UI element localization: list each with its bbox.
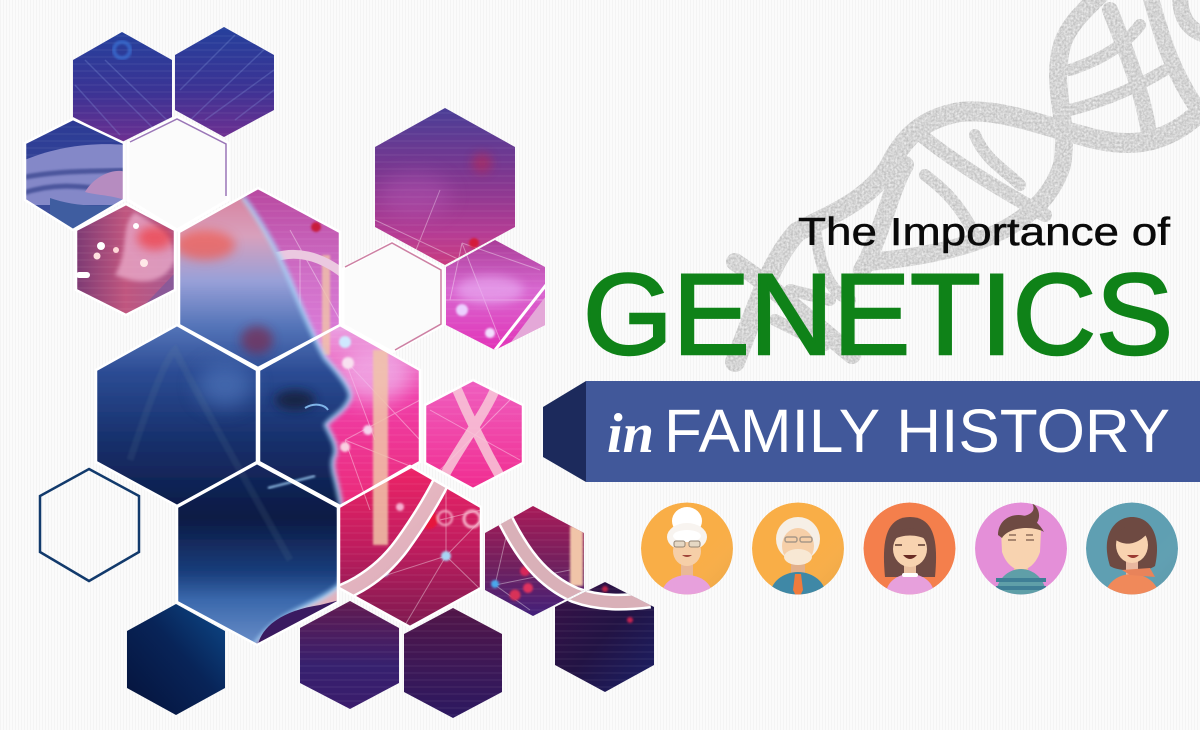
- avatar: woman with scarf: [1086, 502, 1178, 594]
- DNA strand: corner in magenta hexagon: [494, 284, 545, 350]
- hexagon: face and pink network: [259, 325, 420, 506]
- head: brain glow in lower left hexagon: [77, 211, 174, 304]
- head: temple shadow and eye: [241, 326, 273, 354]
- horizontal scan lines: [115, 28, 654, 716]
- avatar: grandmother: [641, 502, 733, 594]
- avatar: boy with striped shirt: [975, 502, 1067, 594]
- hexagon: magenta: [446, 240, 545, 350]
- hexagon: upper head: [179, 188, 340, 368]
- node group: red and pale molecules: [311, 222, 633, 623]
- banner text: FAMILY HISTORY: FAMILY HISTORY: [664, 397, 1170, 465]
- hexagon: navy back of head: [96, 325, 257, 506]
- banner word: in: in: [607, 403, 654, 465]
- avatar: girl with dark hair: [864, 502, 956, 594]
- head: blue sheen on back of head: [197, 363, 253, 407]
- head: brain glow in skull: [175, 230, 235, 260]
- hexagon: blue top left: [73, 32, 172, 142]
- outline hexagon: upper white: [128, 117, 228, 230]
- head: lower shadow: [258, 600, 337, 643]
- hexagon: dark violet: [555, 582, 654, 692]
- hexagon: large purple: [375, 108, 515, 265]
- illustration: network, DNA and head inside hexagons: [26, 28, 654, 716]
- hexagon: crimson: [339, 466, 481, 627]
- hexagon: navy bottom: [127, 604, 225, 715]
- molecular network lines: [290, 190, 570, 625]
- circuit details in blue hexagons: [75, 35, 274, 135]
- glow: red spot on large purple hexagon: [472, 153, 492, 173]
- avatar: grandfather: [752, 502, 844, 594]
- head: brain folds in left hexagon: [26, 144, 123, 228]
- DNA strand: crossing bands in small pink hexagon: [442, 385, 502, 480]
- banner bar: [586, 381, 1200, 482]
- title: GENETICS: GENETICS: [583, 251, 1173, 379]
- outline hexagon: navy: [40, 469, 139, 581]
- hexagon: brain left: [25, 119, 124, 230]
- hexagon: red and violet: [485, 506, 584, 616]
- DNA strand: tan vertical bars: [322, 255, 583, 586]
- glow: pale cloud on magenta hexagon: [456, 276, 524, 304]
- hexagon: small pink: [425, 380, 523, 489]
- glow: pale upper area of pink network: [339, 347, 411, 403]
- hexagon: blue top right: [175, 27, 274, 137]
- head: faint helix lines over navy: [130, 350, 290, 560]
- head: jaw highlight line: [268, 476, 315, 488]
- head: profile silhouette: [90, 190, 350, 650]
- hexagon: plum bottom: [404, 608, 502, 718]
- outline edge: inner white hexagon pink sides: [345, 243, 441, 350]
- panel: hexagon collage: [0, 0, 700, 730]
- head: nostril: [305, 405, 328, 410]
- speckled DNA helix watermark: [735, 0, 1200, 362]
- DNA strand: arch in upper head hexagon: [272, 254, 345, 275]
- outline edge: upper white hexagon purple side: [130, 119, 226, 196]
- white seams between hexagons: [25, 119, 523, 645]
- glow: lavender on large purple hexagon: [384, 171, 446, 214]
- hexagon: jaw: [177, 463, 338, 645]
- hexagon: purple bottom: [300, 601, 399, 709]
- DNA strand: long rising band: [295, 480, 442, 603]
- hexagon: brain glow: [76, 204, 175, 315]
- DNA strand: falling band: [503, 515, 650, 602]
- outline hexagon: inner white: [343, 242, 443, 352]
- banner fold: [543, 381, 586, 482]
- banner: in Family History: [543, 381, 1200, 482]
- title: The Importance of: The Importance of: [798, 211, 1170, 254]
